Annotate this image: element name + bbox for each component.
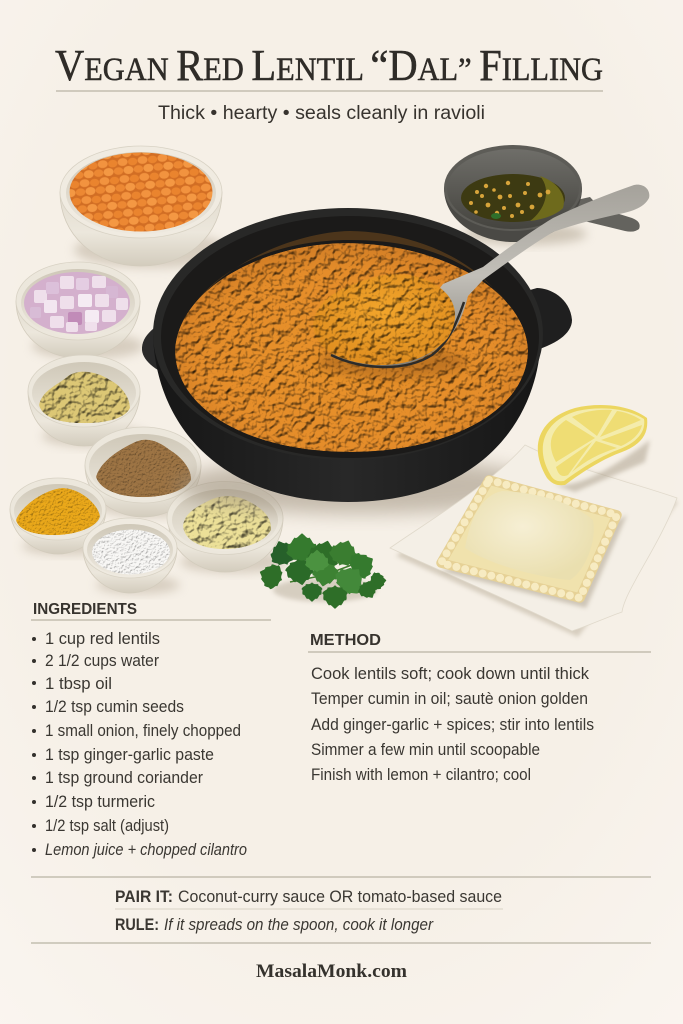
cast iron pan with dal: [142, 185, 649, 514]
method heading: METHOD: [310, 632, 381, 649]
method steps: Simmer a few min until scoopable: [311, 740, 540, 759]
footer brand: MasalaMonk.com: [256, 961, 407, 982]
parchment paper: [390, 445, 678, 637]
method steps: [311, 664, 594, 784]
ingredients list: 1 tsp ground coriander: [45, 768, 203, 787]
pan handles: [530, 288, 572, 352]
pair it line: PAIR IT:: [115, 887, 173, 906]
bowl: minced garlic: [167, 482, 288, 573]
bowl: ginger-garlic paste: [28, 355, 146, 447]
tempering bowl with oil and seeds: [444, 145, 640, 245]
bowl: salt: [83, 518, 180, 594]
rule line: If it spreads on the spoon, cook it longer: [164, 915, 434, 934]
method steps: Add ginger-garlic + spices; stir into lentils: [311, 715, 594, 734]
ingredients list: 1 tsp ginger-garlic paste: [45, 745, 214, 764]
ingredients bullets: [32, 637, 36, 852]
ingredients list: 2 1/2 cups water: [45, 651, 159, 670]
rule line: RULE:: [115, 915, 159, 934]
lemon wedge: [538, 405, 650, 492]
ingredients list: 1 tbsp oil: [45, 674, 112, 693]
cilantro sprig: [255, 533, 387, 609]
ingredients list: 1 cup red lentils: [45, 629, 160, 648]
dal surface: [175, 243, 528, 452]
method steps: Cook lentils soft; cook down until thick: [311, 664, 589, 683]
panel: ingredients: [31, 601, 271, 859]
method steps: Temper cumin in oil; sautè onion golden: [311, 689, 588, 708]
ingredients heading: INGREDIENTS: [33, 601, 137, 618]
spoon shadow on dal: [318, 346, 466, 378]
method steps: Finish with lemon + cilantro; cool: [311, 765, 531, 784]
ingredients list: 1/2 tsp turmeric: [45, 792, 155, 811]
illustration: ingredient bowls and pan: [10, 145, 678, 637]
ingredients list: [45, 629, 247, 859]
subtitle: Thick • hearty • seals cleanly in ravioli: [158, 103, 485, 124]
spoon: [313, 185, 649, 367]
bowl handle: [565, 197, 640, 232]
ravioli: [440, 480, 627, 608]
bowl: chopped onion: [16, 262, 144, 359]
bowl: ground coriander: [85, 427, 206, 517]
ingredients list: 1 small onion, finely chopped: [45, 721, 241, 740]
callout: pair it and rule: [31, 877, 651, 943]
pan body: [153, 334, 541, 502]
bowl: turmeric: [10, 478, 110, 555]
ingredients list: Lemon juice + chopped cilantro: [45, 840, 247, 859]
title: VEGAN RED LENTIL “DAL” FILLING: [55, 41, 603, 90]
bowl: red lentils: [60, 146, 230, 268]
ingredients list: 1/2 tsp salt (adjust): [45, 816, 169, 835]
pair it line: Coconut-curry sauce OR tomato-based sauce: [178, 887, 502, 906]
panel: method: [308, 632, 651, 784]
ingredients list: 1/2 tsp cumin seeds: [45, 697, 184, 716]
dal on pan wall: [185, 231, 515, 320]
